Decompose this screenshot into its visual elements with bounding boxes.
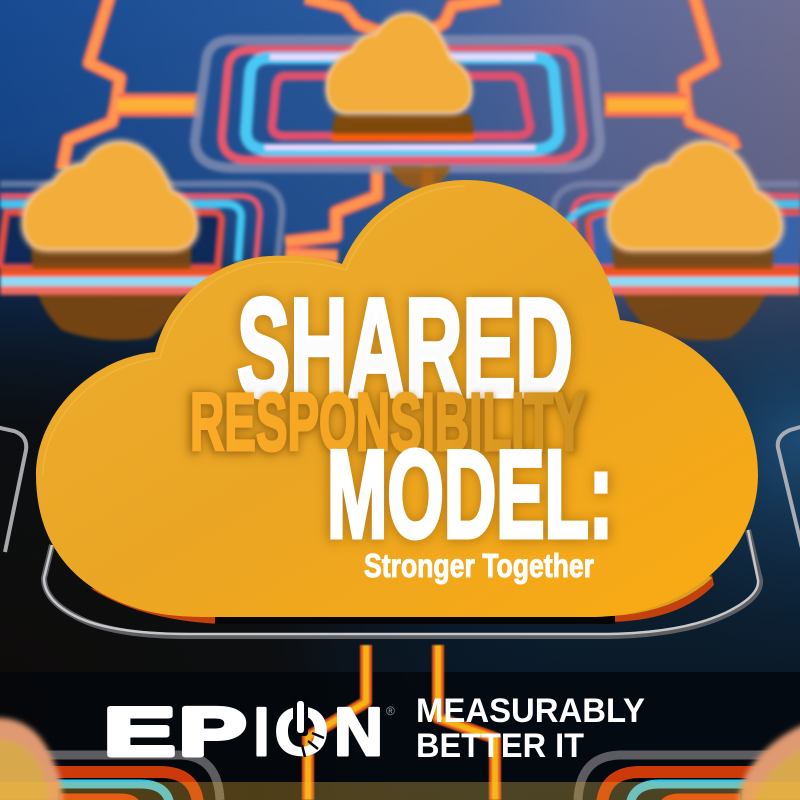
bottom right platform — [578, 755, 800, 800]
logo: EPION: I — [254, 694, 269, 770]
center platform — [195, 40, 600, 168]
tagline: BETTER IT — [416, 727, 584, 765]
logo: EPION — [104, 694, 395, 770]
side cloud shadows — [32, 240, 773, 340]
main cloud underlayer — [90, 570, 714, 624]
logo: EPION: ® — [386, 704, 395, 718]
left edge platform fragment — [0, 427, 26, 552]
subtitle: Stronger Together — [364, 547, 594, 584]
tagline — [416, 692, 645, 765]
circuit lines: top — [62, 0, 736, 256]
logo: EPION: E — [104, 694, 175, 770]
main cloud — [36, 180, 758, 617]
footer band — [0, 672, 800, 782]
left platform — [0, 184, 282, 285]
title shadow glow — [188, 269, 615, 565]
logo: EPION: O — [274, 694, 329, 770]
lower circuit lines — [308, 645, 495, 800]
bottom left platform — [0, 755, 220, 800]
tagline: MEASURABLY — [416, 692, 645, 730]
center small cloud — [328, 16, 470, 111]
left small cloud — [25, 144, 195, 248]
footer bottom tint — [0, 782, 800, 800]
main cloud platform — [44, 530, 760, 636]
bottom corner clouds — [0, 718, 800, 800]
title: RESPONSIBILITY — [188, 377, 587, 469]
center cloud shadow — [332, 114, 474, 189]
bands under side platforms — [0, 269, 800, 295]
icon: power notch in logo O — [293, 698, 324, 757]
right platform — [553, 184, 800, 268]
right edge platform fragment — [778, 426, 800, 548]
right small cloud — [610, 144, 780, 248]
logo: EPION: P — [179, 694, 246, 770]
logo: EPION: N — [334, 694, 383, 770]
